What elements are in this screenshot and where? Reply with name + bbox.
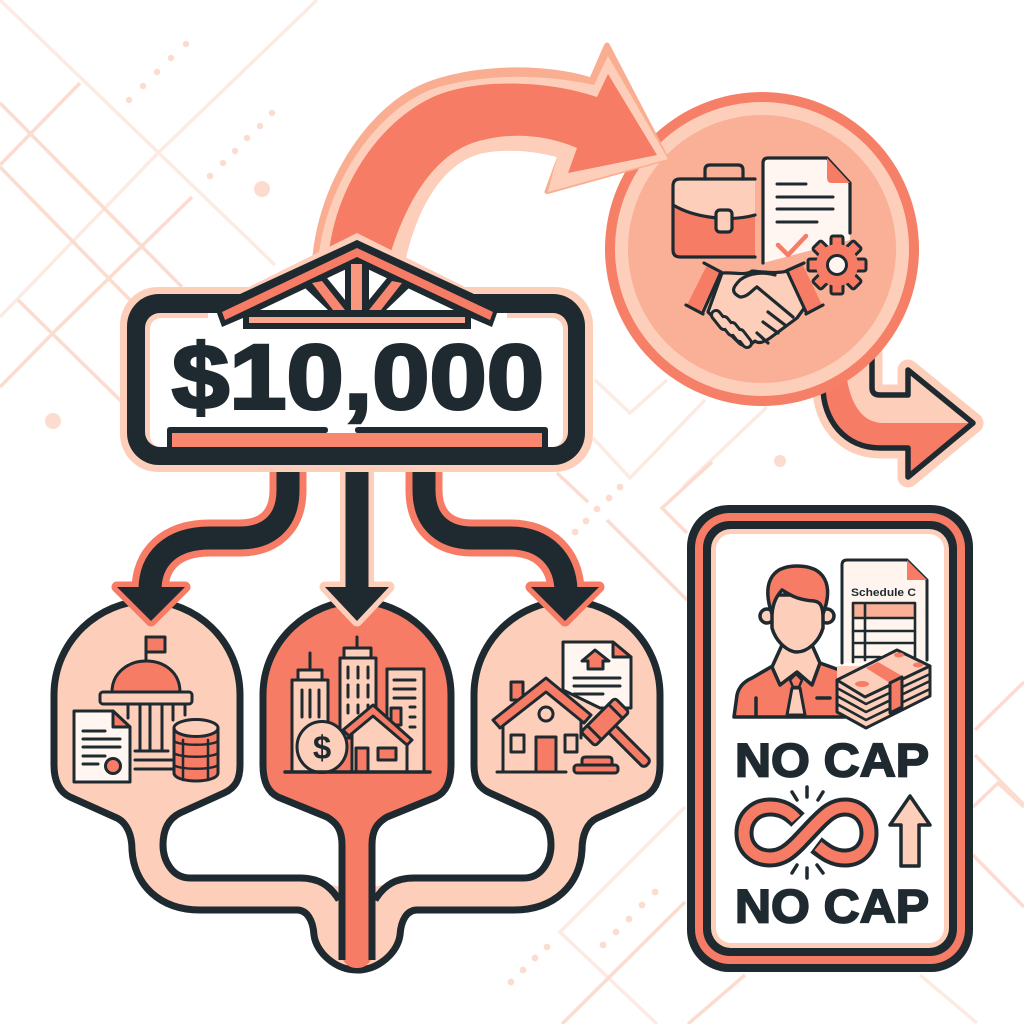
subheading: no cap: NO CAP [735, 880, 929, 932]
arrow: left branch down [117, 470, 288, 621]
panel: no cap card [687, 505, 973, 972]
coin dollar sign: $ [313, 729, 331, 766]
icon: broken infinity [744, 787, 869, 878]
icon: self-employed person [734, 566, 845, 717]
pod: real estate developer branch [357, 601, 664, 970]
icon: Schedule C form [842, 560, 927, 663]
truss roof [217, 240, 497, 329]
panel: business circle [605, 92, 919, 406]
icon: briefcase [673, 165, 755, 257]
arrow: large curved arrow to the circle [312, 42, 670, 262]
arrow: exit arrow leaving the circle [823, 347, 973, 477]
icon: house, deed and gavel [493, 642, 664, 781]
floor beam [167, 427, 548, 447]
pod: government branch [54, 601, 357, 970]
pod: center branch with city and coin [263, 601, 451, 968]
amount text: $10,000 [172, 326, 544, 428]
icon: upward arrow [890, 796, 930, 866]
icon: handshake [686, 263, 823, 346]
icon: gear [808, 236, 866, 294]
icon: skyline, coin and house [285, 637, 430, 772]
arrow: center branch down [325, 470, 389, 621]
heading: no cap: NO CAP [735, 734, 929, 786]
icon: cash stack [837, 650, 930, 728]
form label: Schedule C [851, 587, 916, 599]
icon: capitol with document and coins [74, 637, 218, 782]
arrow: right branch down [424, 470, 599, 621]
panel: $10,000 cap box with truss roof [120, 233, 593, 472]
icon: document with check [763, 158, 850, 263]
